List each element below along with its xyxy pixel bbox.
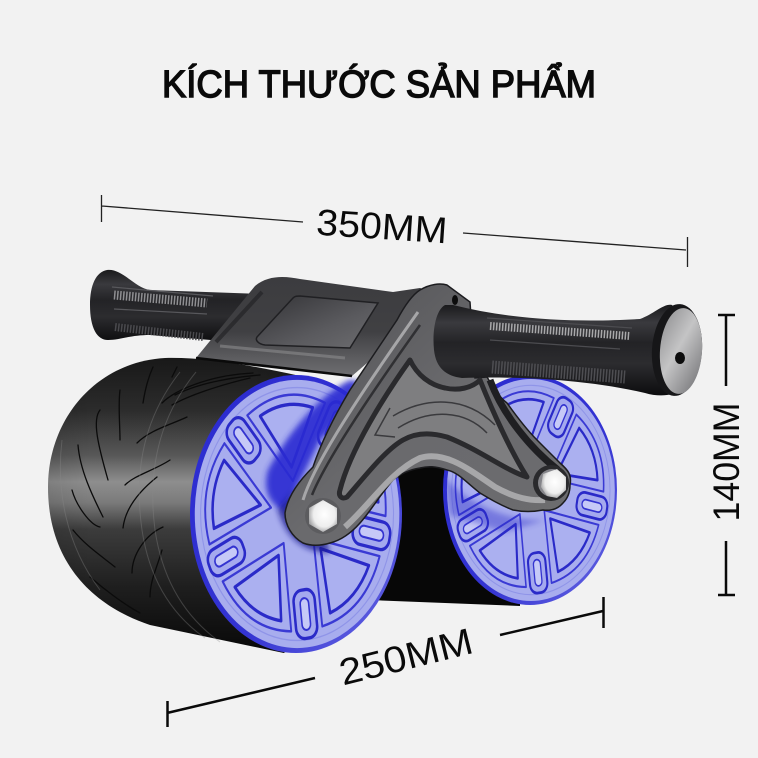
dimension: depth 250MM: 250MM [335,621,477,693]
near tire [48,358,340,653]
arm [285,284,571,545]
arm right dark band [490,380,558,470]
dimension: width 350MM: 350MM [315,202,449,251]
far tire [370,420,520,606]
wheel shadow from arm [266,380,372,512]
right handle [433,302,705,398]
left handle [90,270,262,342]
handle end cap [649,302,705,398]
arm lower highlight band [345,456,545,527]
right wheel shadow [445,478,545,532]
left wheel [190,375,402,653]
tire tread [72,367,260,613]
title: KÍCH THƯỚC SẢN PHẨM [162,61,596,106]
dimension: height 140MM: 140MM [706,402,747,522]
arm inner panel [339,360,527,498]
right wheel [443,375,617,605]
arm light edge [303,312,418,500]
dimension: height 140MM [706,315,747,595]
dimension: width 350MM [102,195,688,267]
arm hole [452,295,458,305]
product: ab roller [48,270,705,653]
right bolt [533,465,569,501]
left bolt [305,498,341,534]
crossbar block [196,277,445,376]
block inset panel [256,296,378,348]
dimension: depth 250MM [167,597,604,727]
arm arrow emblem [375,402,495,437]
